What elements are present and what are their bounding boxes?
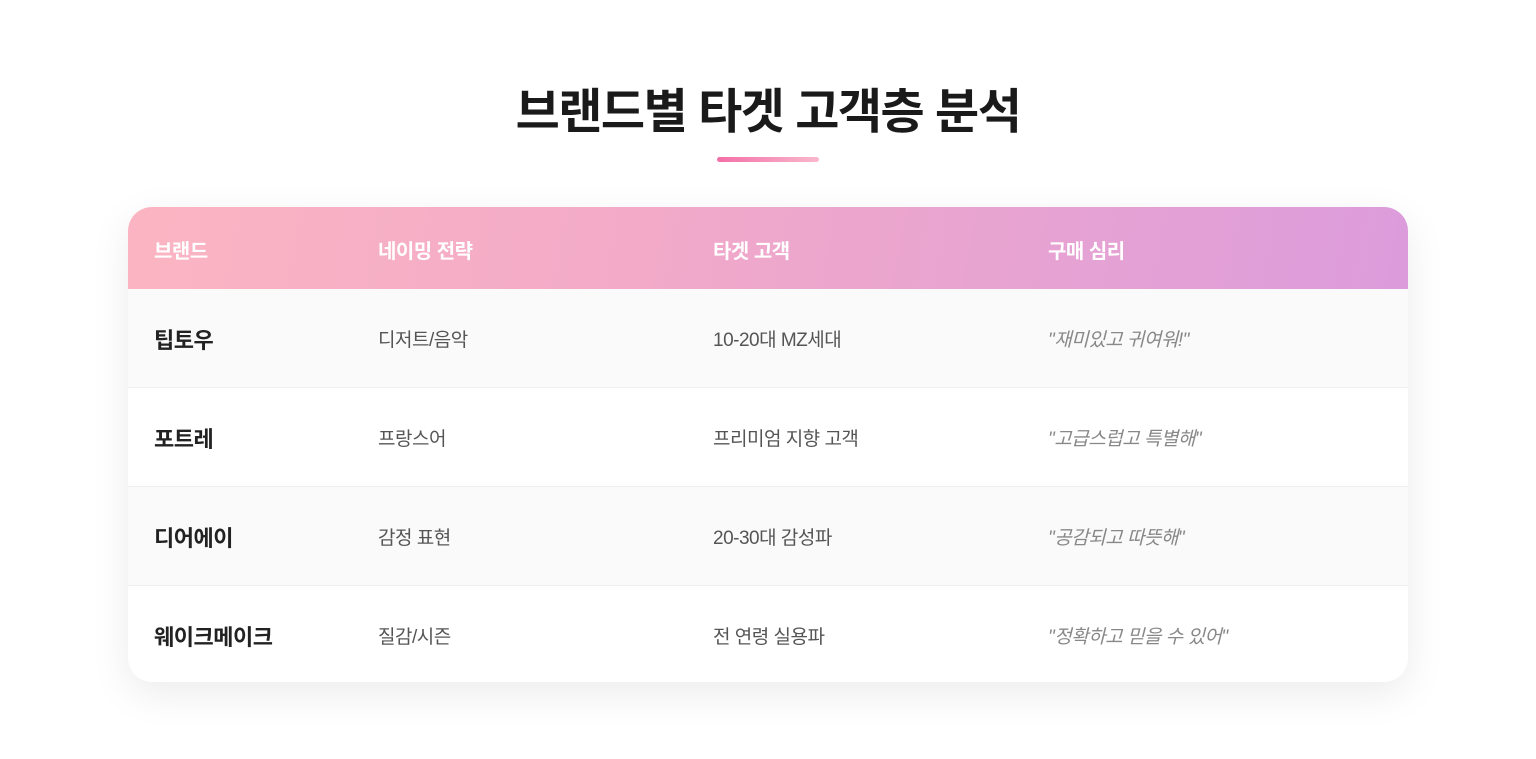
row: 포트레 [128, 387, 1408, 486]
row: 팁토우: 팁토우 [154, 328, 213, 353]
row: 디어에이 [128, 486, 1408, 585]
row: 포트레: 프리미엄 지향 고객 [713, 429, 858, 450]
header row [128, 207, 1408, 289]
row: 웨이크메이크: "정확하고 믿을 수 있어" [1048, 627, 1228, 648]
row: 포트레: 프랑스어 [378, 429, 446, 450]
row: 포트레: "고급스럽고 특별해" [1048, 429, 1201, 450]
row: 포트레: 포트레 [154, 427, 213, 452]
row: 팁토우: 디저트/음악 [378, 330, 468, 351]
title underline [717, 157, 819, 162]
row: 디어에이: 감정 표현 [378, 528, 451, 549]
row: 웨이크메이크: 웨이크메이크 [154, 625, 272, 650]
header row: 타겟 고객 [713, 241, 790, 263]
row: 팁토우: 10-20대 MZ세대 [713, 330, 841, 351]
table [128, 207, 1408, 682]
row: 디어에이: 20-30대 감성파 [713, 528, 832, 549]
row: 팁토우: "재미있고 귀여워!" [1048, 330, 1189, 351]
row: 팁토우 [128, 289, 1408, 387]
row: 디어에이: "공감되고 따뜻해" [1048, 528, 1184, 549]
row: 웨이크메이크 [128, 585, 1408, 684]
title: 브랜드별 타겟 고객층 분석 [516, 86, 1020, 139]
row: 웨이크메이크: 질감/시즌 [378, 627, 451, 648]
header row: 브랜드 [154, 241, 208, 263]
row: 디어에이: 디어에이 [154, 526, 233, 551]
header row: 구매 심리 [1048, 241, 1125, 263]
row: 웨이크메이크: 전 연령 실용파 [713, 627, 824, 648]
header row: 네이밍 전략 [378, 241, 473, 263]
